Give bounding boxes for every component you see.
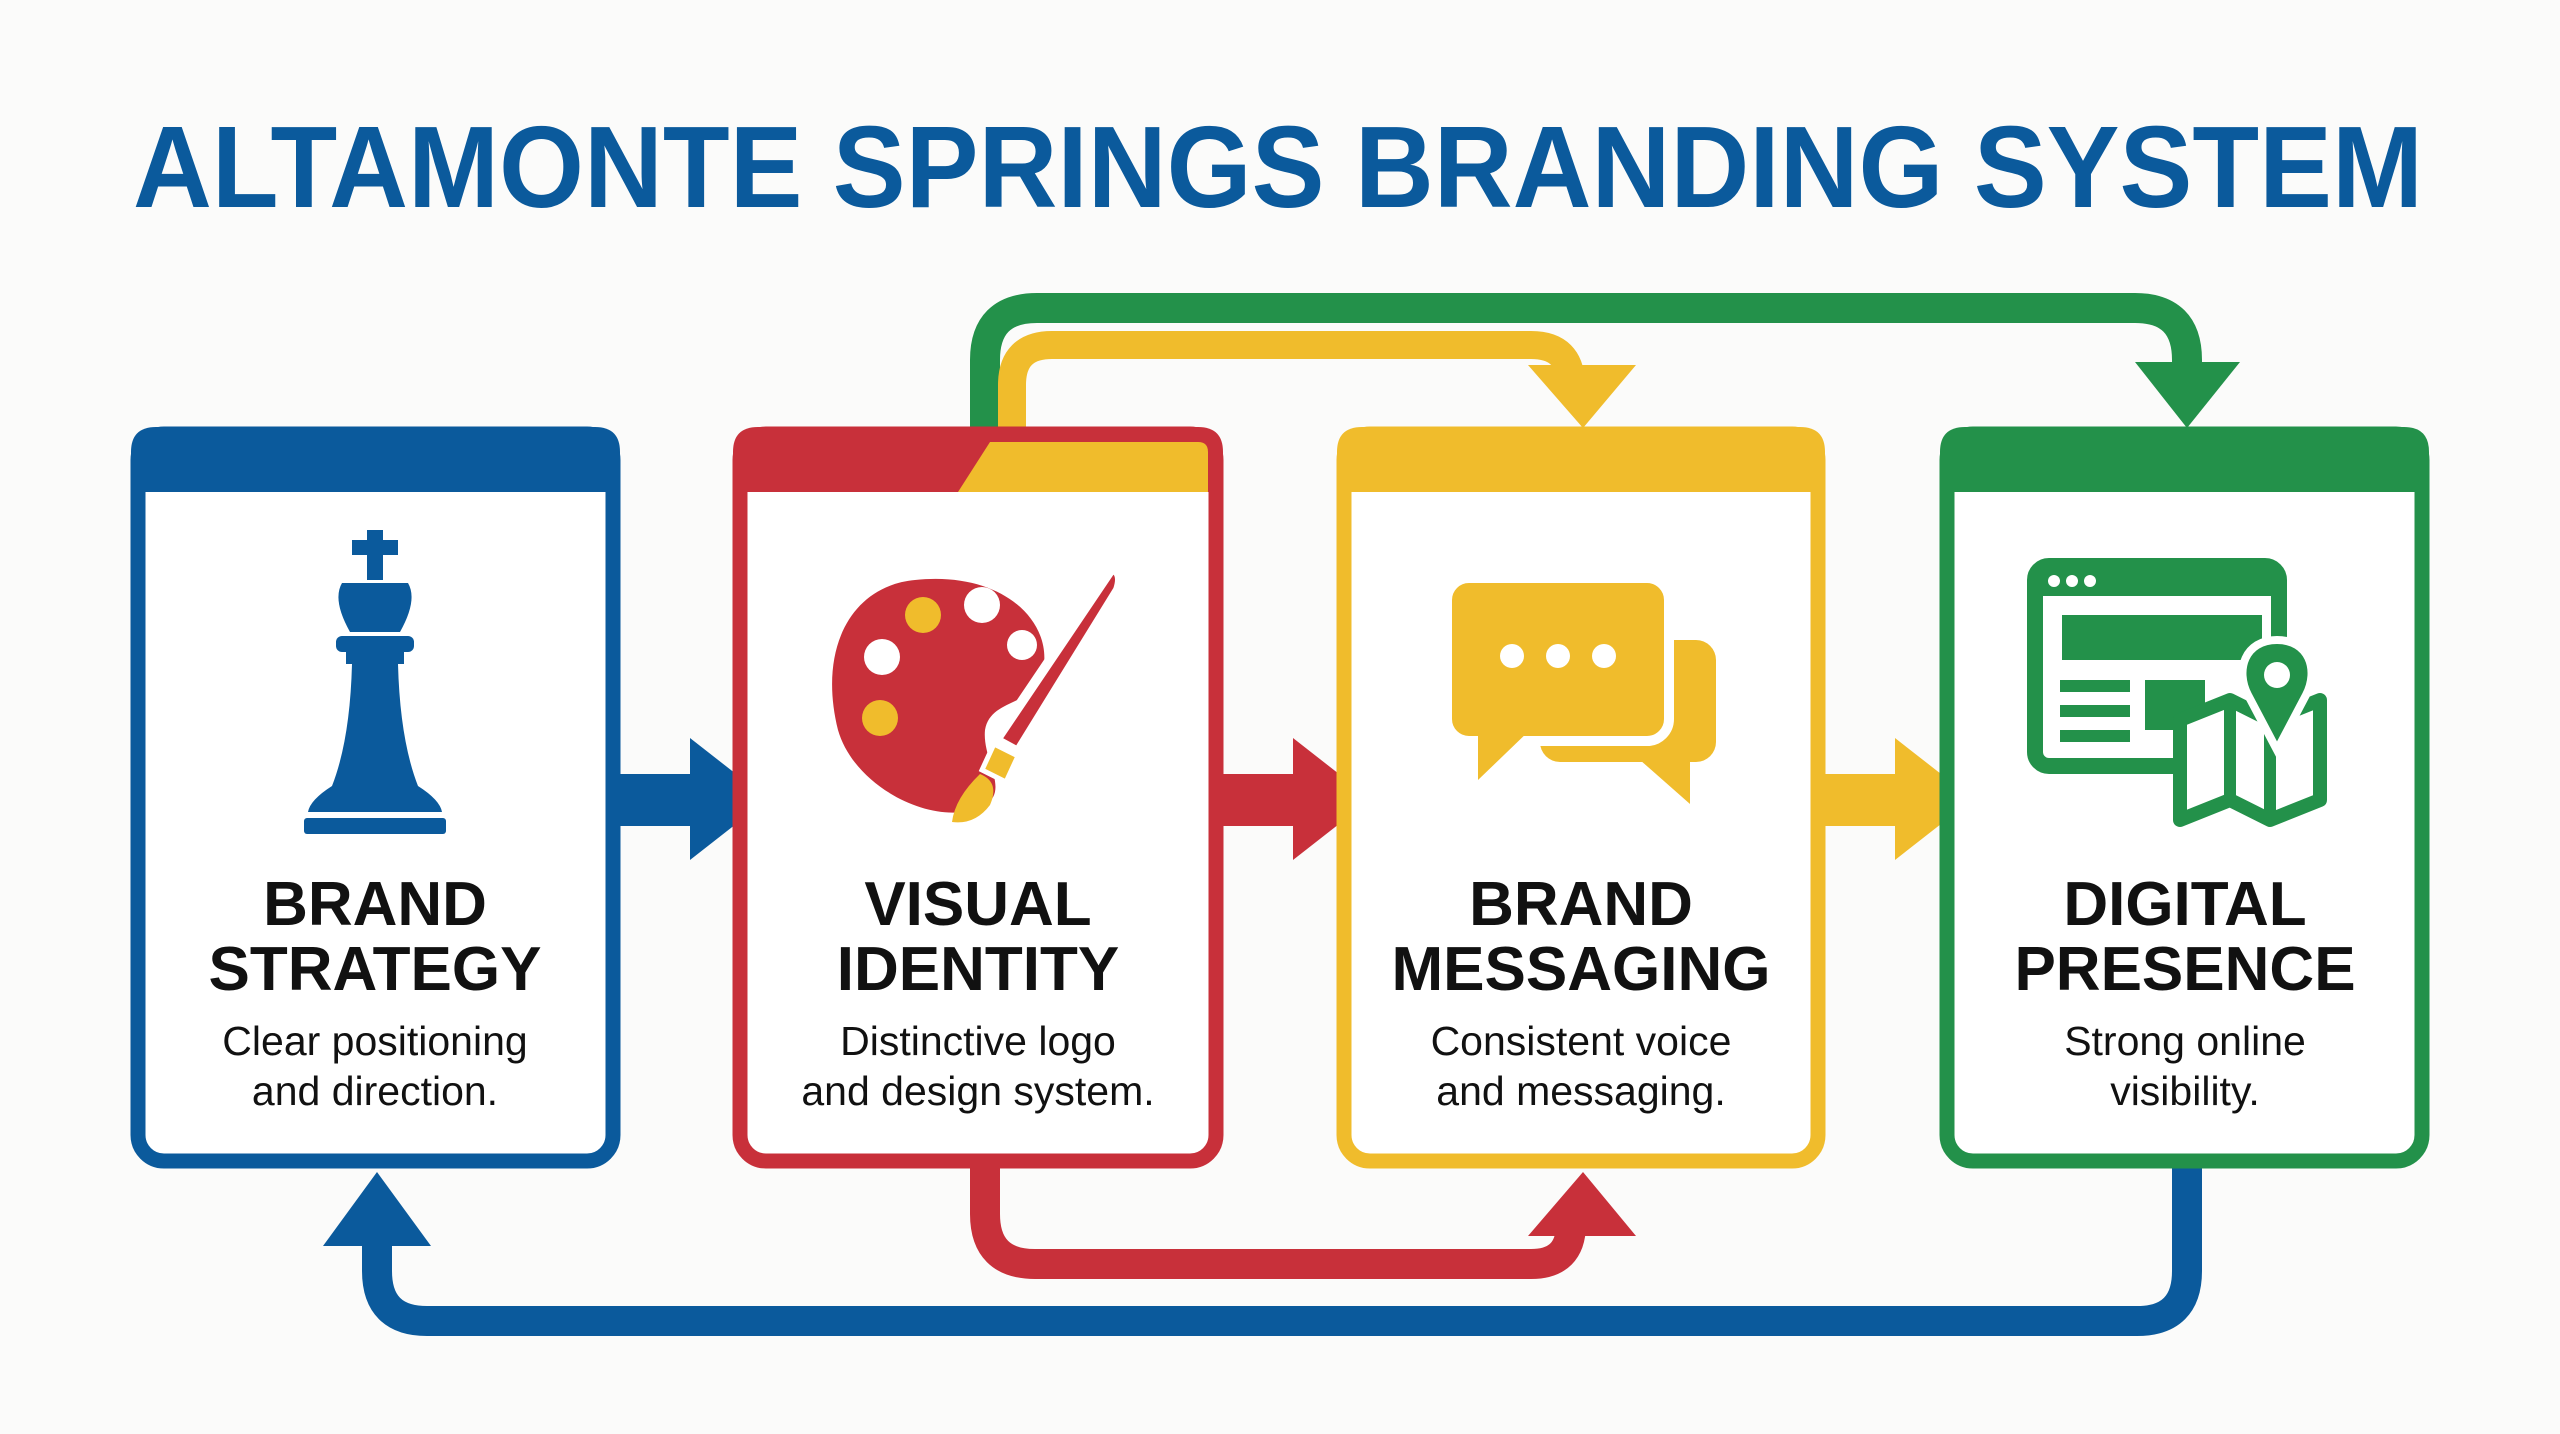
arrow: red loop visual identity to brand messaging [985, 1160, 1636, 1264]
panel: brand strategy: and direction. [252, 1068, 498, 1114]
panel: digital presence [1940, 427, 2429, 1161]
arrow: green loop visual identity to digital presence [985, 308, 2240, 440]
icon: browser and map pin [2035, 566, 2320, 820]
title: ALTAMONTE SPRINGS BRANDING SYSTEM [133, 102, 2423, 232]
text: identity description: Distinctive logo [840, 1018, 1116, 1064]
icon: chess king [304, 530, 446, 834]
arrow: blue loop digital presence to brand strategy [323, 1160, 2187, 1321]
text: digital description: Strong online [2064, 1018, 2306, 1064]
heading: digital presence: DIGITAL [2063, 870, 2307, 939]
panel: brand strategy [131, 427, 620, 1161]
icon: chat bubbles [1447, 578, 1716, 804]
arrow: yellow loop visual identity to brand messaging [1012, 345, 1636, 440]
heading: visual identity: VISUAL [864, 870, 1092, 939]
panel: brand messaging: MESSAGING [1392, 935, 1770, 1004]
arrow: identity to messaging [1218, 738, 1371, 860]
text: messaging description: Consistent voice [1431, 1018, 1731, 1064]
arrow: strategy to identity [615, 738, 768, 860]
heading: brand messaging: BRAND [1469, 870, 1693, 939]
arrow: messaging to digital [1820, 738, 1973, 860]
text: strategy description: Clear positioning [222, 1018, 528, 1064]
heading: brand strategy: BRAND [263, 870, 487, 939]
panel: brand messaging: and messaging. [1436, 1068, 1726, 1114]
panel: brand strategy: STRATEGY [209, 935, 541, 1004]
icon: palette and brush [832, 568, 1120, 822]
panel: visual identity [733, 427, 1223, 1161]
panel: visual identity: IDENTITY [837, 935, 1119, 1004]
panel: visual identity: and design system. [801, 1068, 1155, 1114]
panel: brand messaging [1337, 427, 1825, 1161]
panel: digital presence: PRESENCE [2014, 935, 2356, 1004]
panel: digital presence: visibility. [2110, 1068, 2260, 1114]
